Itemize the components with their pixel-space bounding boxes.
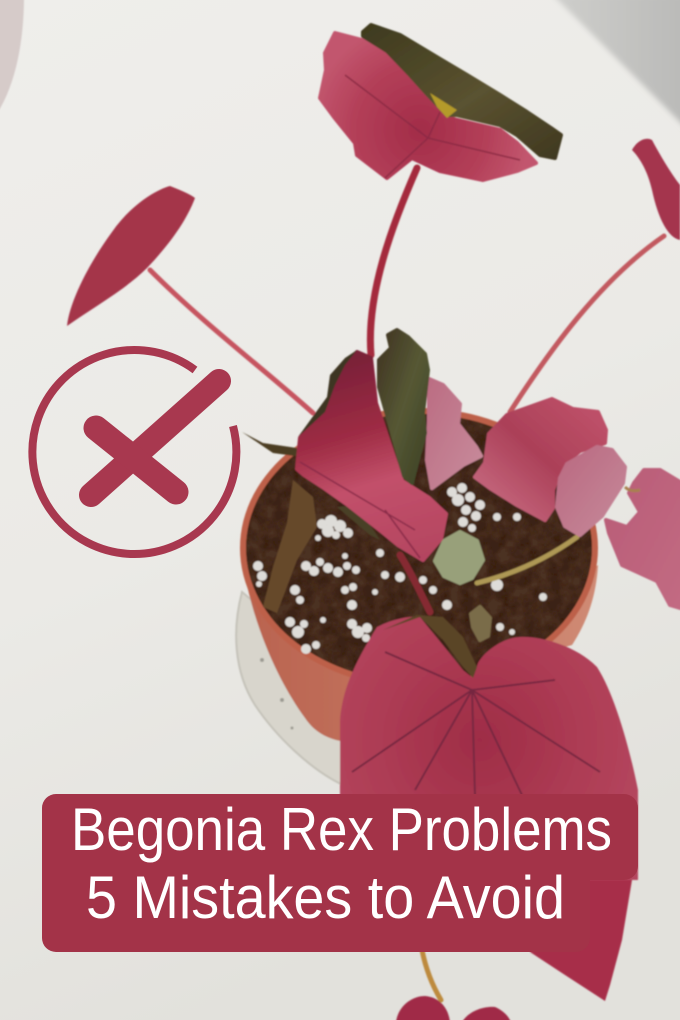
top right leaf: [632, 139, 680, 240]
pale center leaf: [427, 379, 481, 488]
title line 1: Begonia Rex Problems: [71, 796, 612, 863]
glass object top left: [0, 0, 24, 115]
icon: crossed-out circle: [32, 350, 236, 554]
title line 2: 5 Mistakes to Avoid: [86, 864, 565, 931]
left leaf: [67, 186, 195, 326]
dried bud: [471, 607, 490, 640]
top leaf: [320, 25, 561, 180]
pot rim: [240, 408, 598, 688]
pot body: [241, 545, 598, 742]
far right leaves: [557, 447, 680, 608]
title banner: [42, 794, 638, 952]
inner stems: [477, 537, 577, 583]
small leaf on soil: [435, 532, 483, 583]
right pink leaf: [475, 399, 606, 520]
perlite: [253, 483, 547, 654]
green leaf strip: [337, 505, 380, 540]
soil: [246, 414, 592, 682]
dark green folded leaf: [379, 330, 428, 483]
terracotta pot: [240, 408, 598, 742]
bottom stem: [422, 950, 441, 1000]
bottom cut-off leaves: [396, 996, 511, 1020]
glass saucer: [236, 592, 352, 786]
plant stems: [150, 168, 664, 413]
background wall corner: [552, 0, 680, 132]
brown twig leaf: [242, 432, 302, 457]
bark chip: [263, 480, 317, 613]
center red leaf: [297, 350, 446, 560]
bottom large leaf: [340, 615, 638, 1001]
